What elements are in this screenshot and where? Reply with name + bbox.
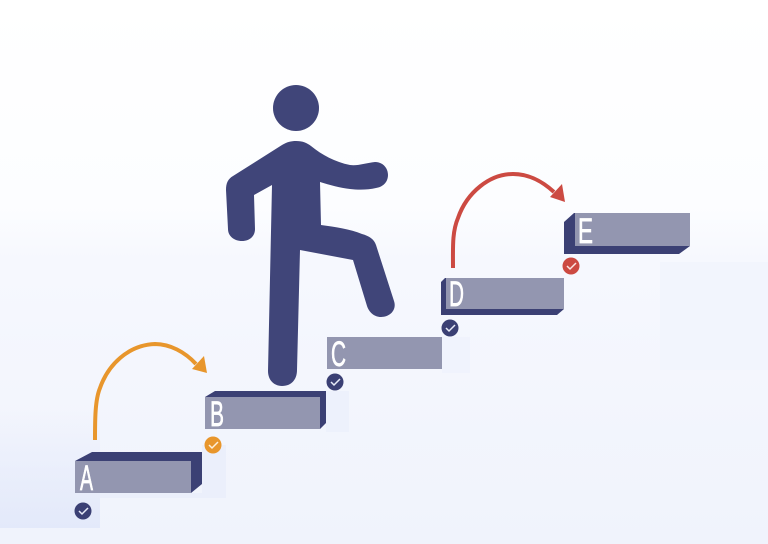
check badge B xyxy=(204,436,222,454)
check badge C xyxy=(326,374,344,390)
step C xyxy=(327,335,442,374)
check badge E xyxy=(562,258,580,274)
step A xyxy=(75,452,202,498)
step E xyxy=(564,212,690,254)
label C: C xyxy=(331,335,346,374)
step D xyxy=(441,275,564,315)
person head xyxy=(273,85,319,131)
step B xyxy=(205,391,326,434)
label E: E xyxy=(578,212,593,251)
arrow: D to E xyxy=(453,174,565,268)
check badge D xyxy=(442,320,458,336)
label D: D xyxy=(449,275,464,314)
person body xyxy=(226,141,395,386)
person figure xyxy=(226,85,395,386)
label A: A xyxy=(80,459,93,498)
check badge A xyxy=(74,502,92,520)
label B: B xyxy=(210,395,224,434)
arrow: A to B xyxy=(95,344,207,440)
